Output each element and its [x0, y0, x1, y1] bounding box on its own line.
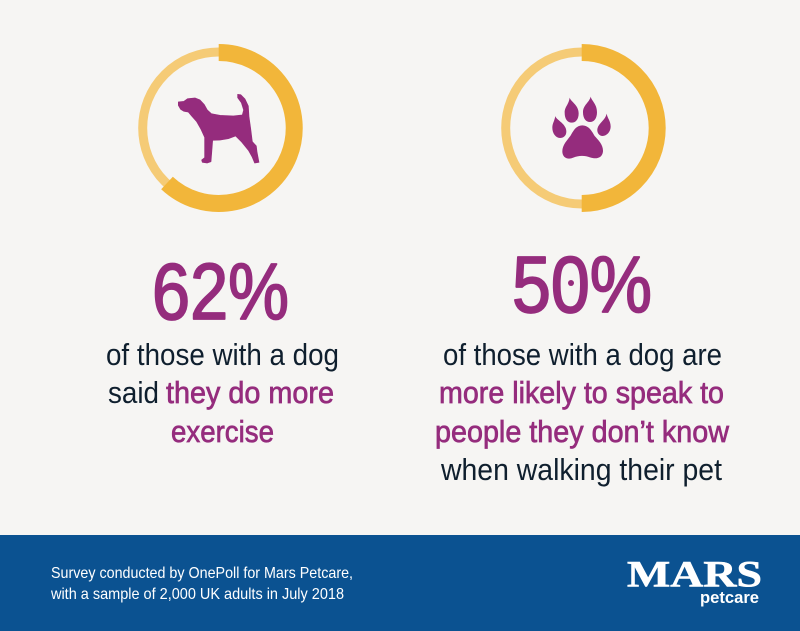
icon: dog — [178, 94, 259, 163]
text: 62% description: exercise — [171, 414, 274, 449]
text: 62% description — [106, 337, 339, 449]
logo: Mars Petcare — [627, 554, 762, 607]
text: survey source note: Survey conducted by OnePoll for Mars Petcare, — [51, 565, 353, 582]
ring chart: 50% — [506, 52, 658, 204]
panel: 62% statistic — [106, 52, 339, 449]
text: 62% description: they do more — [166, 375, 334, 410]
logo: Mars Petcare: MARS — [627, 554, 762, 596]
text: survey source note — [50, 565, 353, 603]
text: 50% description: when walking their pet — [440, 452, 722, 487]
figure: 50%: 50% — [512, 240, 652, 329]
icon: paw print — [552, 97, 611, 159]
text: 50% description: more likely to speak to — [439, 375, 724, 410]
text: 50% description: of those with a dog are — [443, 337, 722, 372]
text: 50% description: people they don’t know — [435, 414, 730, 449]
text: 50% description — [435, 337, 730, 487]
ring chart: 62% — [143, 52, 295, 204]
text: 62% description: of those with a dog — [106, 337, 339, 372]
footer band — [0, 535, 800, 631]
figure: 62%: 62% — [152, 247, 289, 336]
text: 62% description: said — [108, 375, 159, 410]
logo: Mars Petcare: petcare — [700, 588, 759, 607]
panel: 50% statistic — [435, 52, 730, 487]
text: survey source note: with a sample of 2,000 UK adults in July 2018 — [50, 586, 344, 603]
